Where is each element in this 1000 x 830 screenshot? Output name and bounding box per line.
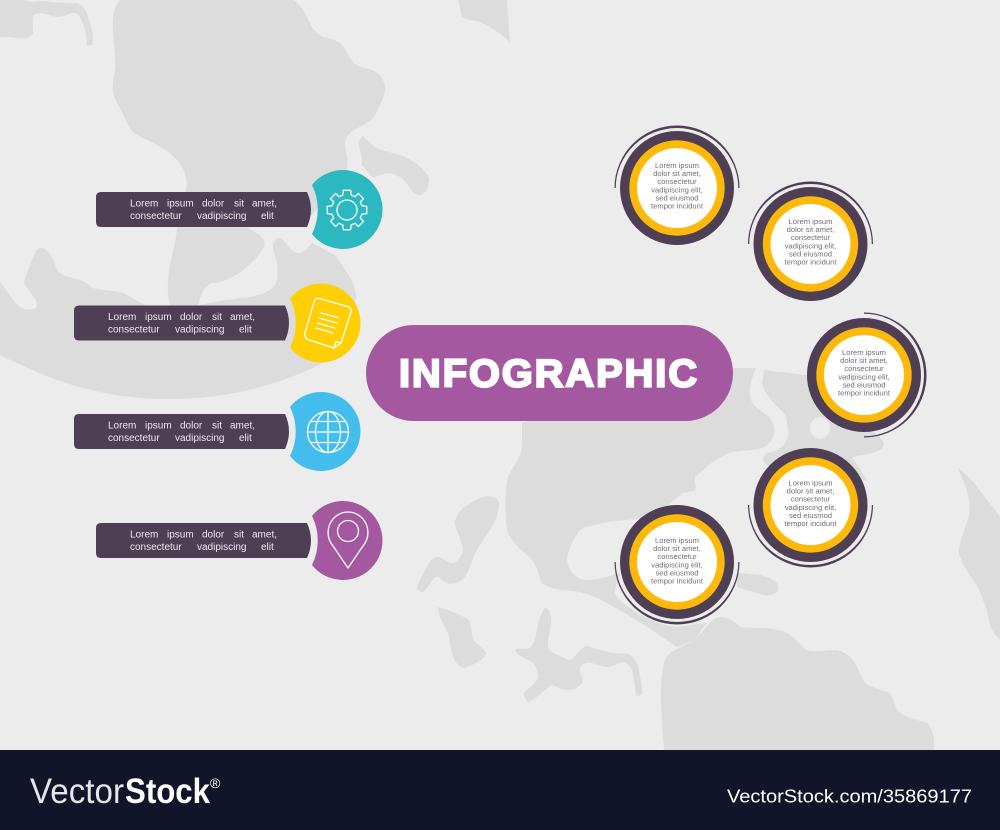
label bar 1: amet, [252,198,277,210]
label bar 1: consectetur [130,211,182,222]
ring 1: consectetur [657,177,697,186]
label bar 2: consectetur [108,324,160,336]
ring 5 [614,505,740,625]
ring 1: sed eiusmod [655,193,699,202]
icon: gear [327,190,367,230]
label bar 2: Lorem [108,312,136,323]
label bar 4: ipsum [167,530,194,540]
icon: document [305,298,351,348]
footer logo: Vector [30,772,124,811]
ring 1: dolor sit amet, [653,169,701,178]
item 4: location [96,501,382,580]
ring 5: consectetur [657,552,697,561]
central title pill [366,325,733,421]
label bar 2: vadipiscing [175,324,224,336]
title text: INFOGRAPHIC [399,352,699,396]
label bar 4: elit [261,542,274,553]
ring 2: tempor incidunt [785,258,837,266]
label bar 1: ipsum [167,198,194,210]
footer url: VectorStock.com/35869177 [727,786,972,806]
teal circle [312,170,382,249]
ring 2: Lorem ipsum [789,217,832,226]
label bar 4: amet, [252,530,277,540]
label bar 2: ipsum [145,312,172,323]
ring 1: vadipiscing elit, [651,185,703,194]
label bar 1 [96,192,311,227]
ring 3 [807,312,926,438]
footer logo: Stock [125,772,210,811]
label bar 3: amet, [230,420,255,432]
footer logo: ® [210,775,221,791]
ring 3: tempor incidunt [838,388,891,398]
ring 2: dolor sit amet, [787,225,834,234]
ring 4: consectetur [791,495,831,504]
blue circle [290,392,360,471]
label bar 3: sit [212,420,222,432]
ring 2: sed eiusmod [789,249,832,258]
ring 4 [748,448,873,568]
label bar 3: vadipiscing [175,433,224,444]
ring 2: consectetur [791,233,831,242]
ring 4: Lorem ipsum [789,478,832,488]
icon: globe [308,412,348,452]
ring 5: Lorem ipsum [655,536,699,545]
label bar 2: sit [212,312,222,323]
label bar 3: elit [239,433,252,444]
label bar 3 [74,414,289,449]
ring 4: sed eiusmod [789,511,832,520]
item 2: document [74,284,360,363]
footer logo [30,772,221,811]
label bar 1: Lorem [130,198,158,210]
footer band [0,750,1000,830]
ring 1 [614,126,740,245]
ring 5: tempor incidunt [651,576,704,586]
label bar 4 [96,523,311,558]
ring 2 [748,182,873,301]
label bar 4: dolor [202,530,225,540]
ring 3: sed eiusmod [842,380,886,389]
ring 2: vadipiscing elit, [785,241,836,250]
label bar 1: dolor [202,198,225,210]
ring 3: Lorem ipsum [842,348,886,357]
label bar 1: sit [234,198,244,210]
item 3: globe [74,392,360,471]
label bar 3: consectetur [108,433,160,444]
label bar 2: elit [239,324,252,336]
label bar 4: consectetur [130,542,182,553]
ring 5: sed eiusmod [655,568,699,577]
label bar 2 [74,306,289,340]
label bar 2: amet, [230,312,255,323]
label bar 3: Lorem [108,420,136,432]
ring 1: tempor incidunt [651,202,704,210]
ring 3: dolor sit amet, [840,356,888,365]
ring 1: Lorem ipsum [655,161,699,170]
label bar 4: Lorem [130,530,158,540]
label bar 3: dolor [180,420,203,432]
ring 3: vadipiscing elit, [838,372,890,381]
ring 4: dolor sit amet, [787,487,834,496]
label bar 2: dolor [180,312,203,323]
yellow circle [290,284,360,363]
label bar 3: ipsum [145,420,172,432]
item 1: settings [96,170,382,249]
ring 5: dolor sit amet, [653,544,701,553]
label bar 4: vadipiscing [197,542,246,553]
label bar 1: vadipiscing [197,211,246,222]
ring 4: vadipiscing elit, [785,503,836,512]
label bar 4: sit [234,530,244,540]
label bar 1: elit [261,211,274,222]
icon: map pin [328,512,368,568]
ring 3: consectetur [844,364,884,373]
ring 5: vadipiscing elit, [651,560,703,569]
purple circle [312,501,382,580]
ring 4: tempor incidunt [785,519,837,528]
